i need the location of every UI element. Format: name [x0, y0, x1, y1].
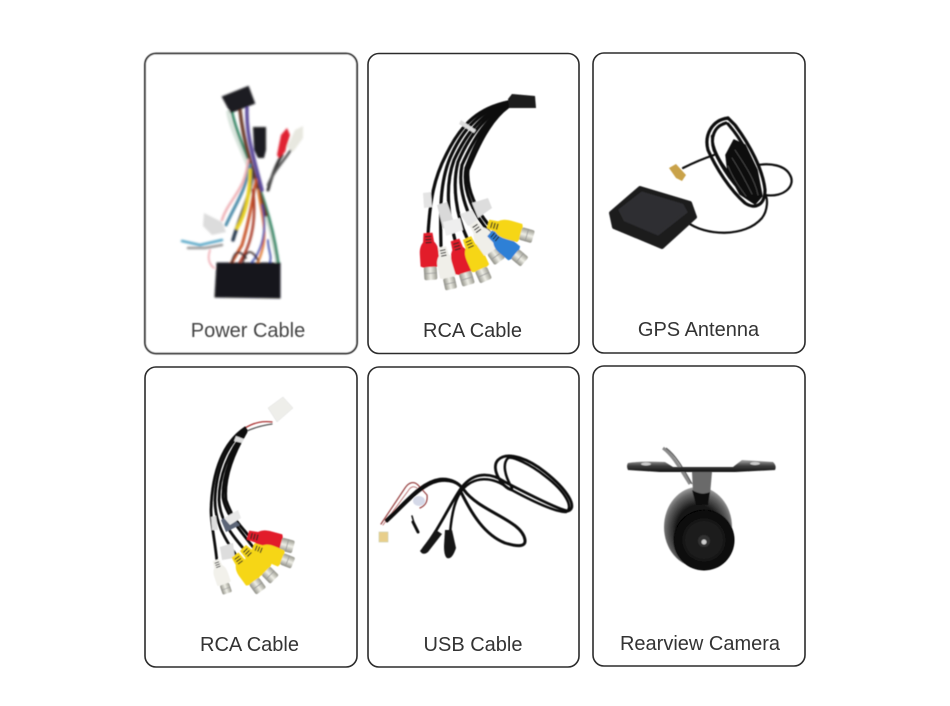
- icon: rearview camera: [627, 448, 776, 570]
- label: RCA Cable: RCA Cable: [200, 634, 299, 656]
- icon: RCA cable small bundle: [209, 397, 296, 596]
- panel: RCA Cable 2: [145, 367, 357, 667]
- panel: RCA Cable 1: [368, 54, 579, 354]
- label: Rearview Camera: Rearview Camera: [620, 633, 781, 655]
- icon: USB cable: [379, 456, 572, 558]
- label: RCA Cable: RCA Cable: [423, 320, 522, 342]
- label: GPS Antenna: GPS Antenna: [638, 319, 760, 341]
- label: Power Cable: Power Cable: [191, 320, 305, 342]
- icon: power cable harness: [182, 87, 303, 298]
- icon: RCA cable bundle: [419, 94, 536, 291]
- panel: USB Cable: [368, 367, 579, 667]
- panel: Rearview Camera: [593, 366, 805, 666]
- panel: Power Cable: [145, 54, 357, 354]
- panel: GPS Antenna: [593, 53, 805, 353]
- label: USB Cable: USB Cable: [424, 634, 522, 656]
- icon: GPS antenna: [611, 118, 792, 247]
